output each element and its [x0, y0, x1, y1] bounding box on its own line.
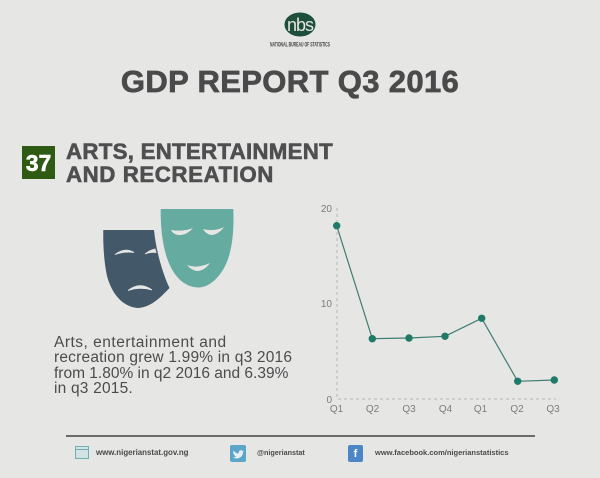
body text: from 1.80% in q2 2016 and 6.39%	[54, 365, 288, 382]
icon: facebook: f	[354, 448, 357, 460]
line chart: 0	[326, 395, 332, 406]
body text: recreation grew 1.99% in q3 2016	[54, 349, 292, 366]
icon: theatre masks	[103, 209, 234, 308]
icon: twitter	[230, 445, 246, 462]
line chart: Q3	[402, 404, 416, 415]
twitter handle: @nigerianstat	[257, 448, 305, 457]
title: GDP REPORT Q3 2016	[121, 64, 459, 99]
line chart: 10	[321, 299, 332, 310]
line chart: Q2	[366, 404, 380, 415]
line chart: Q3	[546, 404, 560, 415]
section heading	[66, 139, 333, 187]
facebook url: www.facebook.com/nigerianstatistics	[375, 448, 509, 457]
logo: nbs	[270, 12, 330, 48]
website url: www.nigerianstat.gov.ng	[96, 448, 189, 457]
line chart: 20	[321, 204, 332, 215]
section heading: ARTS, ENTERTAINMENT	[66, 139, 333, 164]
line chart	[321, 204, 560, 415]
line chart: Q1	[474, 404, 488, 415]
line chart: Q1	[330, 404, 344, 415]
line chart: Q4	[439, 404, 453, 415]
logo: nbs: nbs	[287, 15, 314, 35]
body text: in q3 2015.	[54, 380, 133, 397]
icon: website	[75, 446, 89, 459]
section number badge: 37	[26, 150, 51, 176]
icon: facebook	[348, 445, 363, 462]
section heading: AND RECREATION	[66, 162, 274, 187]
body text	[54, 334, 292, 397]
line chart: Q2	[510, 404, 524, 415]
section number badge	[22, 146, 55, 179]
footer divider	[66, 435, 535, 437]
body text: Arts, entertainment and	[54, 334, 227, 351]
